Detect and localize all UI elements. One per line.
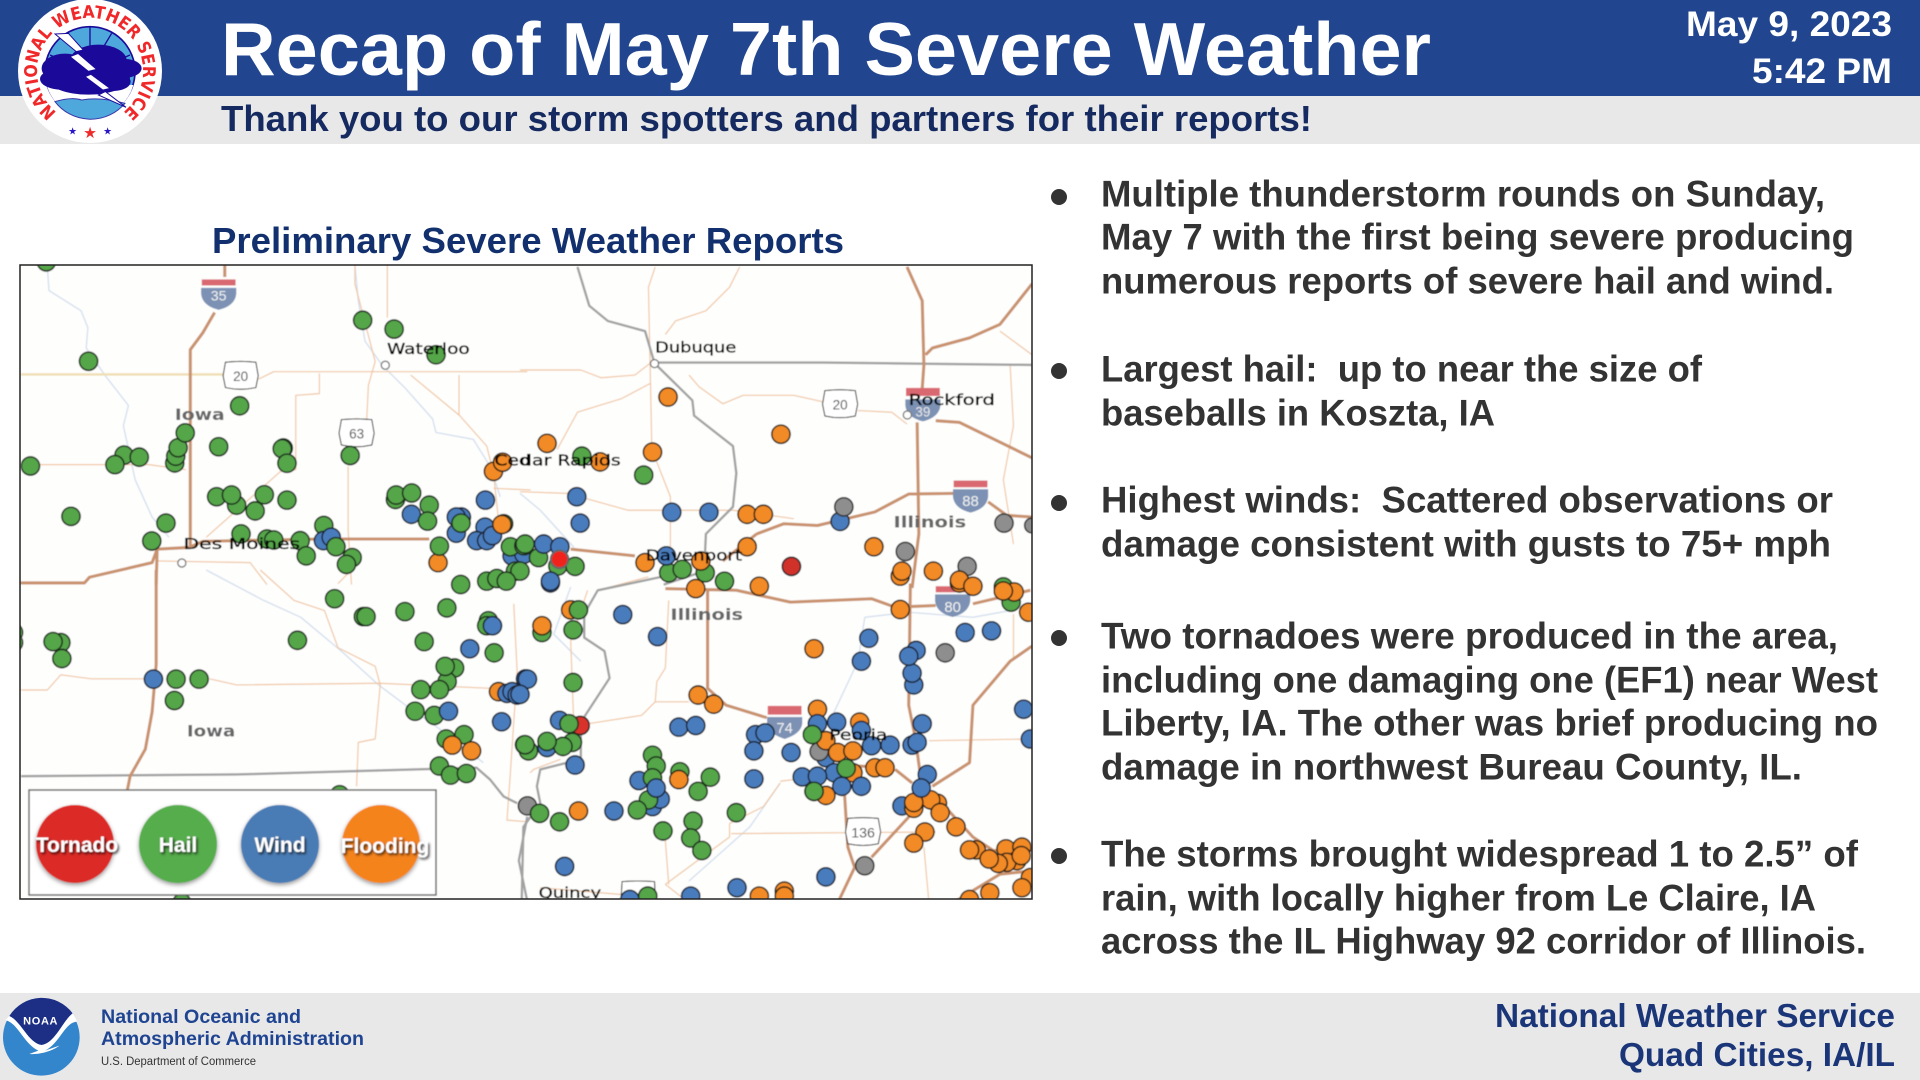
icon: National Weather Service logo: ★ — [103, 126, 112, 137]
shield: US 63 — [339, 419, 374, 447]
map frame — [20, 265, 1032, 899]
bullet 4: damage in northwest Bureau County, IL. — [1101, 746, 1802, 788]
legend item: tornado: Tornado — [36, 834, 118, 857]
shield: I-88: 88 — [962, 494, 979, 510]
shield: US 20 east: 20 — [833, 398, 848, 413]
text block: NWS office: Quad Cities, IA/IL — [1619, 1036, 1895, 1073]
bullet 2 — [1051, 348, 1703, 434]
bullet 5: across the IL Highway 92 corridor of Illinois. — [1101, 920, 1866, 962]
bullet 1: May 7 with the first being severe producing — [1101, 216, 1854, 258]
text block: NWS office — [1495, 997, 1895, 1073]
bullet 4: Liberty, IA. The other was brief producing no — [1101, 702, 1878, 744]
panel: report map — [4, 253, 1040, 912]
legend item: wind: Wind — [254, 834, 306, 857]
icon: National Weather Service logo: ★ — [83, 125, 97, 142]
date and time: May 9, 2023 — [1686, 5, 1892, 44]
shield: I-74: 74 — [776, 721, 793, 737]
bullet 5 — [1051, 834, 1866, 962]
shield: I-88 — [953, 481, 988, 513]
shield: I-35: 35 — [211, 289, 227, 305]
shield: US 136 — [845, 818, 881, 845]
bullet 3: Highest winds: Scattered observations or — [1101, 480, 1833, 520]
markers: northeast map section — [511, 388, 1040, 592]
legend item: flooding — [341, 805, 429, 883]
bullet 4: including one damaging one (EF1) near West — [1101, 660, 1878, 700]
map labels: cities and states: Illinois — [670, 605, 743, 624]
map labels: cities and states: Iowa — [187, 722, 235, 741]
legend item: wind — [241, 805, 319, 883]
date and time: 5:42 PM — [1752, 52, 1892, 91]
legend item: hail: Hail — [159, 834, 197, 857]
shield: I-35 — [201, 279, 236, 310]
markers: southeast map section — [511, 571, 1040, 909]
map labels: cities and states — [175, 339, 995, 902]
bullet 2: Largest hail: up to near the size of — [1101, 348, 1703, 390]
shield: I-39: 39 — [915, 404, 930, 419]
shield: US 20: 20 — [233, 369, 248, 384]
shield: I-80: 80 — [944, 600, 961, 616]
map labels: cities and states: Ced — [494, 451, 531, 469]
bullet 1: numerous reports of severe hail and wind. — [1101, 260, 1834, 302]
map labels: cities and states: Dubuque — [655, 339, 736, 357]
legend — [29, 790, 436, 895]
icon: National Weather Service logo: NATIONAL WEATHER SERVICE — [24, 5, 156, 121]
text block: NWS office: National Weather Service — [1495, 997, 1895, 1034]
text block: NOAA name: U.S. Department of Commerce — [101, 1056, 256, 1068]
shield: I-80 — [935, 586, 970, 617]
text block: NOAA name: National Oceanic and — [101, 1006, 301, 1028]
legend item: tornado — [36, 805, 118, 883]
highway shields — [201, 279, 988, 905]
bullet 1: Multiple thunderstorm rounds on Sunday, — [1101, 174, 1825, 214]
storm report markers — [4, 253, 1040, 912]
markers: southwest map section — [4, 569, 535, 912]
title: Recap of May 7th Severe Weather — [221, 7, 1431, 91]
shield: US 136: 136 — [851, 825, 875, 841]
bullet 4 — [1051, 616, 1878, 788]
shield: US 20 — [223, 361, 258, 389]
map labels: cities and states: dar Rapids — [520, 451, 621, 469]
map labels: cities and states: Rockford — [909, 391, 995, 409]
map labels: cities and states: Peoria — [829, 726, 887, 744]
shield: I-39 — [905, 388, 940, 421]
bullet 1 — [1051, 174, 1854, 302]
bullet 5: rain, with locally higher from Le Claire, IA — [1101, 878, 1816, 918]
bullet 2: baseballs in Koszta, IA — [1101, 392, 1495, 434]
map labels: cities and states: Waterloo — [387, 340, 470, 358]
text block: NOAA name — [101, 1006, 364, 1068]
icon: NOAA logo — [3, 998, 80, 1076]
header band — [0, 0, 1920, 144]
text block: NOAA name: Atmospheric Administration — [101, 1028, 364, 1050]
date and time — [1686, 5, 1892, 91]
map labels: cities and states: Iowa — [175, 405, 225, 424]
map labels: cities and states: Quincy — [539, 884, 601, 902]
legend item: hail — [139, 805, 217, 883]
map heading: Preliminary Severe Weather Reports — [212, 220, 844, 261]
map labels: cities and states: Davenport — [646, 546, 742, 564]
map base: roads, rivers and borders — [20, 265, 1032, 903]
footer band — [0, 993, 1920, 1080]
map labels: cities and states: Des Moines — [184, 535, 300, 553]
subtitle: Thank you to our storm spotters and partners for their reports! — [221, 98, 1312, 139]
icon: NOAA logo: NOAA — [23, 1015, 58, 1027]
shield: US Quincy — [620, 880, 656, 896]
bullet 3 — [1051, 480, 1833, 564]
text block: key points — [1051, 174, 1878, 962]
markers: northwest map section — [21, 253, 533, 580]
legend item: flooding: Flooding — [341, 835, 429, 858]
shield: US 63: 63 — [349, 427, 364, 442]
shield: I-74 — [767, 706, 802, 739]
bullet 5: The storms brought widespread 1 to 2.5” of — [1101, 834, 1859, 874]
icon: National Weather Service logo: ★ — [68, 126, 77, 137]
shield: US 20 east — [823, 390, 858, 418]
bullet 4: Two tornadoes were produced in the area, — [1101, 616, 1838, 656]
bullet 3: damage consistent with gusts to 75+ mph — [1101, 524, 1831, 564]
map labels: cities and states: Illinois — [893, 512, 966, 531]
